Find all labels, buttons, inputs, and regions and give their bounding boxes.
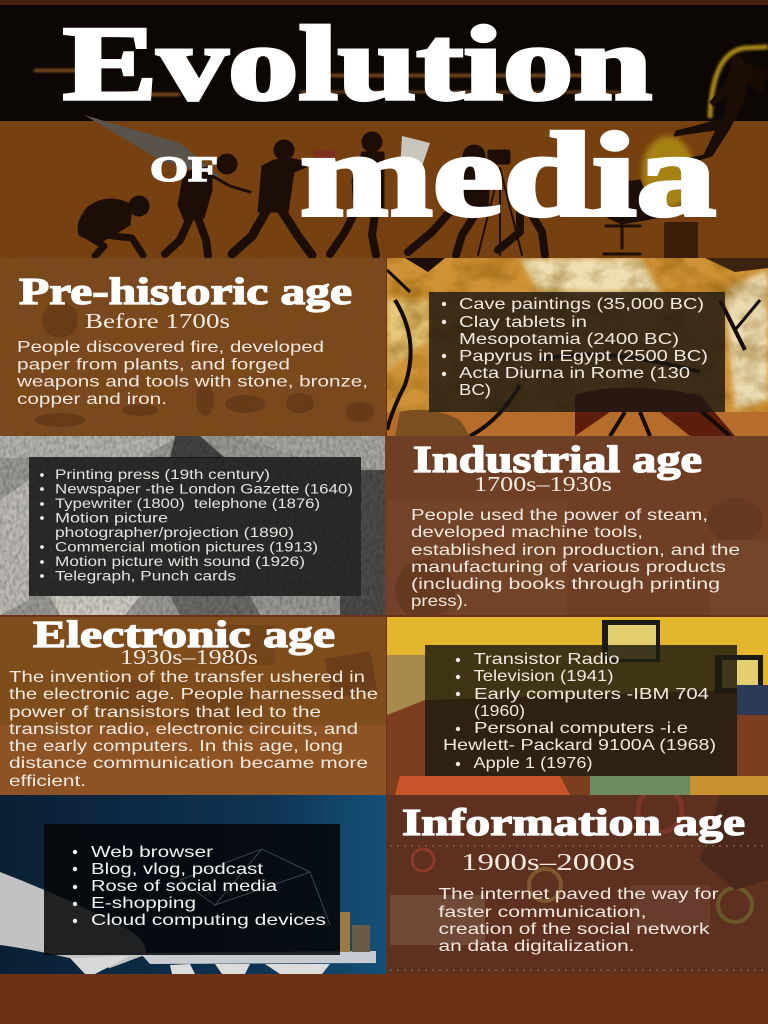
panel: information media list	[0, 795, 386, 974]
faded machine engraving	[707, 498, 763, 540]
bullet list	[442, 296, 708, 399]
dark text box	[429, 292, 725, 412]
description: distance communication became more	[9, 755, 368, 772]
brown lower band	[0, 121, 768, 258]
faded crowd with laptops	[0, 625, 386, 795]
heading: Industrial age	[413, 439, 702, 481]
faded circuit board	[390, 788, 768, 970]
panel texture	[0, 258, 386, 436]
description: faster communication,	[438, 904, 646, 921]
description: weapons and tools with stone, bronze,	[16, 374, 368, 390]
heading: Pre-historic age	[19, 271, 352, 313]
figure: hunched walker	[165, 154, 250, 255]
description: The internet paved the way for	[438, 886, 718, 903]
panel: pre-historic age text	[0, 258, 386, 436]
icon: yellow glow below leaping figure	[642, 136, 698, 258]
figure: walking man with book	[232, 140, 314, 255]
bullet list: Mesopotamia (2400 BC)	[459, 331, 679, 348]
figure: man with newspaper	[330, 132, 384, 255]
icon: newspaper	[400, 136, 430, 172]
bullet list: (1960)	[474, 703, 525, 720]
bullet list: Web browser	[91, 844, 213, 861]
bullet list	[443, 651, 716, 772]
bullet list: Telegraph, Punch cards	[55, 568, 236, 584]
description: The invention of the transfer ushered in	[9, 669, 365, 686]
dark text box	[425, 645, 737, 776]
figure: tripod	[478, 168, 522, 255]
date range: 1930s–1980s	[120, 645, 258, 669]
panel: electronic media list	[387, 617, 768, 795]
panel background	[0, 258, 386, 436]
footer band	[0, 974, 768, 1024]
icon: leaping figure silhouette	[674, 56, 768, 162]
description: (including books through printing	[411, 576, 720, 593]
bullet list: Cave paintings (35,000 BC)	[459, 296, 704, 313]
horizon streaks	[34, 69, 620, 96]
description: the electronic age. People harnessed the	[9, 686, 378, 703]
heading: Information age	[402, 802, 745, 844]
figure: photographer	[408, 145, 510, 255]
panel: industrial age text	[385, 436, 768, 620]
figure: crouching human	[78, 196, 149, 256]
bullet list	[73, 844, 326, 929]
description: manufacturing of various products	[411, 559, 726, 576]
top strip	[0, 0, 768, 5]
description: efficient.	[9, 773, 86, 790]
description: People used the power of steam,	[411, 507, 708, 524]
bullet list	[40, 467, 353, 584]
bullet list: Hewlett- Packard 9100A (1968)	[443, 737, 716, 754]
header banner	[0, 0, 768, 258]
description: transistor radio, electronic circuits, and	[9, 721, 358, 738]
description: power of transistors that led to the	[9, 704, 321, 721]
icon: book	[312, 149, 336, 166]
heading: Electronic age	[33, 614, 335, 656]
description	[411, 507, 740, 610]
title: Evolution: Evolution	[63, 5, 652, 122]
description	[9, 669, 378, 790]
bullet list: Rose of social media	[91, 878, 277, 895]
dark text box	[29, 457, 361, 596]
figure: seated person at computer	[604, 180, 656, 254]
bullet list: Acta Diurna in Rome (130	[459, 365, 690, 382]
panel: information age text	[386, 788, 768, 974]
description: paper from plants, and forged	[17, 356, 290, 374]
bullet list: Motion picture	[55, 510, 168, 526]
description: the early computers. In this age, long	[9, 738, 343, 755]
date range: 1700s–1930s	[474, 472, 612, 496]
panel: pre-historic media list	[387, 258, 768, 436]
bullet list: Typewriter (1800) telephone (1876)	[55, 496, 320, 511]
description	[438, 886, 718, 955]
panel background	[386, 795, 768, 974]
bullet list: Personal computers -i.e	[474, 720, 688, 737]
bullet list: E-shopping	[91, 895, 196, 912]
description: an data digitalization.	[438, 938, 634, 955]
evolution silhouettes	[78, 132, 656, 256]
subtitle: of: OF	[150, 149, 218, 189]
bullet list: Apple 1 (1976)	[474, 755, 592, 772]
bullet list: BC)	[459, 382, 491, 399]
bullet list: Papyrus in Egypt (2500 BC)	[459, 348, 708, 365]
description: creation of the social network	[438, 921, 710, 938]
panel background	[385, 436, 768, 615]
bullet list: Television (1941)	[474, 668, 614, 685]
bullet list: Blog, vlog, podcast	[91, 861, 264, 878]
date range: 1900s–2000s	[461, 850, 635, 876]
date range: Before 1700s	[85, 309, 230, 333]
icon: quill	[84, 115, 222, 178]
bullet list: Cloud computing devices	[91, 912, 326, 929]
network lines	[180, 849, 330, 925]
panel: industrial media list	[0, 436, 385, 615]
bullet list: Newspaper -the London Gazette (1640)	[55, 482, 353, 496]
description: established iron production, and the	[411, 542, 740, 559]
bullet list: Early computers -IBM 704	[474, 686, 709, 703]
icon: halo around leaping figure	[710, 47, 768, 118]
description: copper and iron.	[17, 391, 167, 408]
blue background	[0, 795, 386, 974]
description: press).	[411, 593, 468, 610]
cave painting background	[387, 258, 768, 436]
figure: bending person	[498, 205, 545, 255]
panel: electronic age text	[0, 614, 386, 795]
bullet list: Motion picture with sound (1926)	[55, 554, 305, 569]
bullet list: Transistor Radio	[474, 651, 620, 668]
description: developed machine tools,	[411, 524, 643, 541]
cave figures	[35, 302, 374, 427]
black title band	[0, 5, 768, 121]
description: People discovered fire, developed	[17, 339, 324, 356]
panel background	[0, 617, 386, 795]
description	[16, 339, 368, 408]
bullet list: Clay tablets in	[459, 314, 587, 331]
hand holding phone with city	[0, 872, 376, 974]
poster background	[387, 617, 768, 795]
bullet list: Commercial motion pictures (1913)	[55, 540, 318, 554]
bullet list: photographer/projection (1890)	[55, 525, 294, 540]
bullet list: Printing press (19th century)	[55, 467, 270, 482]
title: media: media	[300, 108, 716, 241]
engraving background	[0, 436, 385, 615]
dark text box	[44, 824, 340, 955]
